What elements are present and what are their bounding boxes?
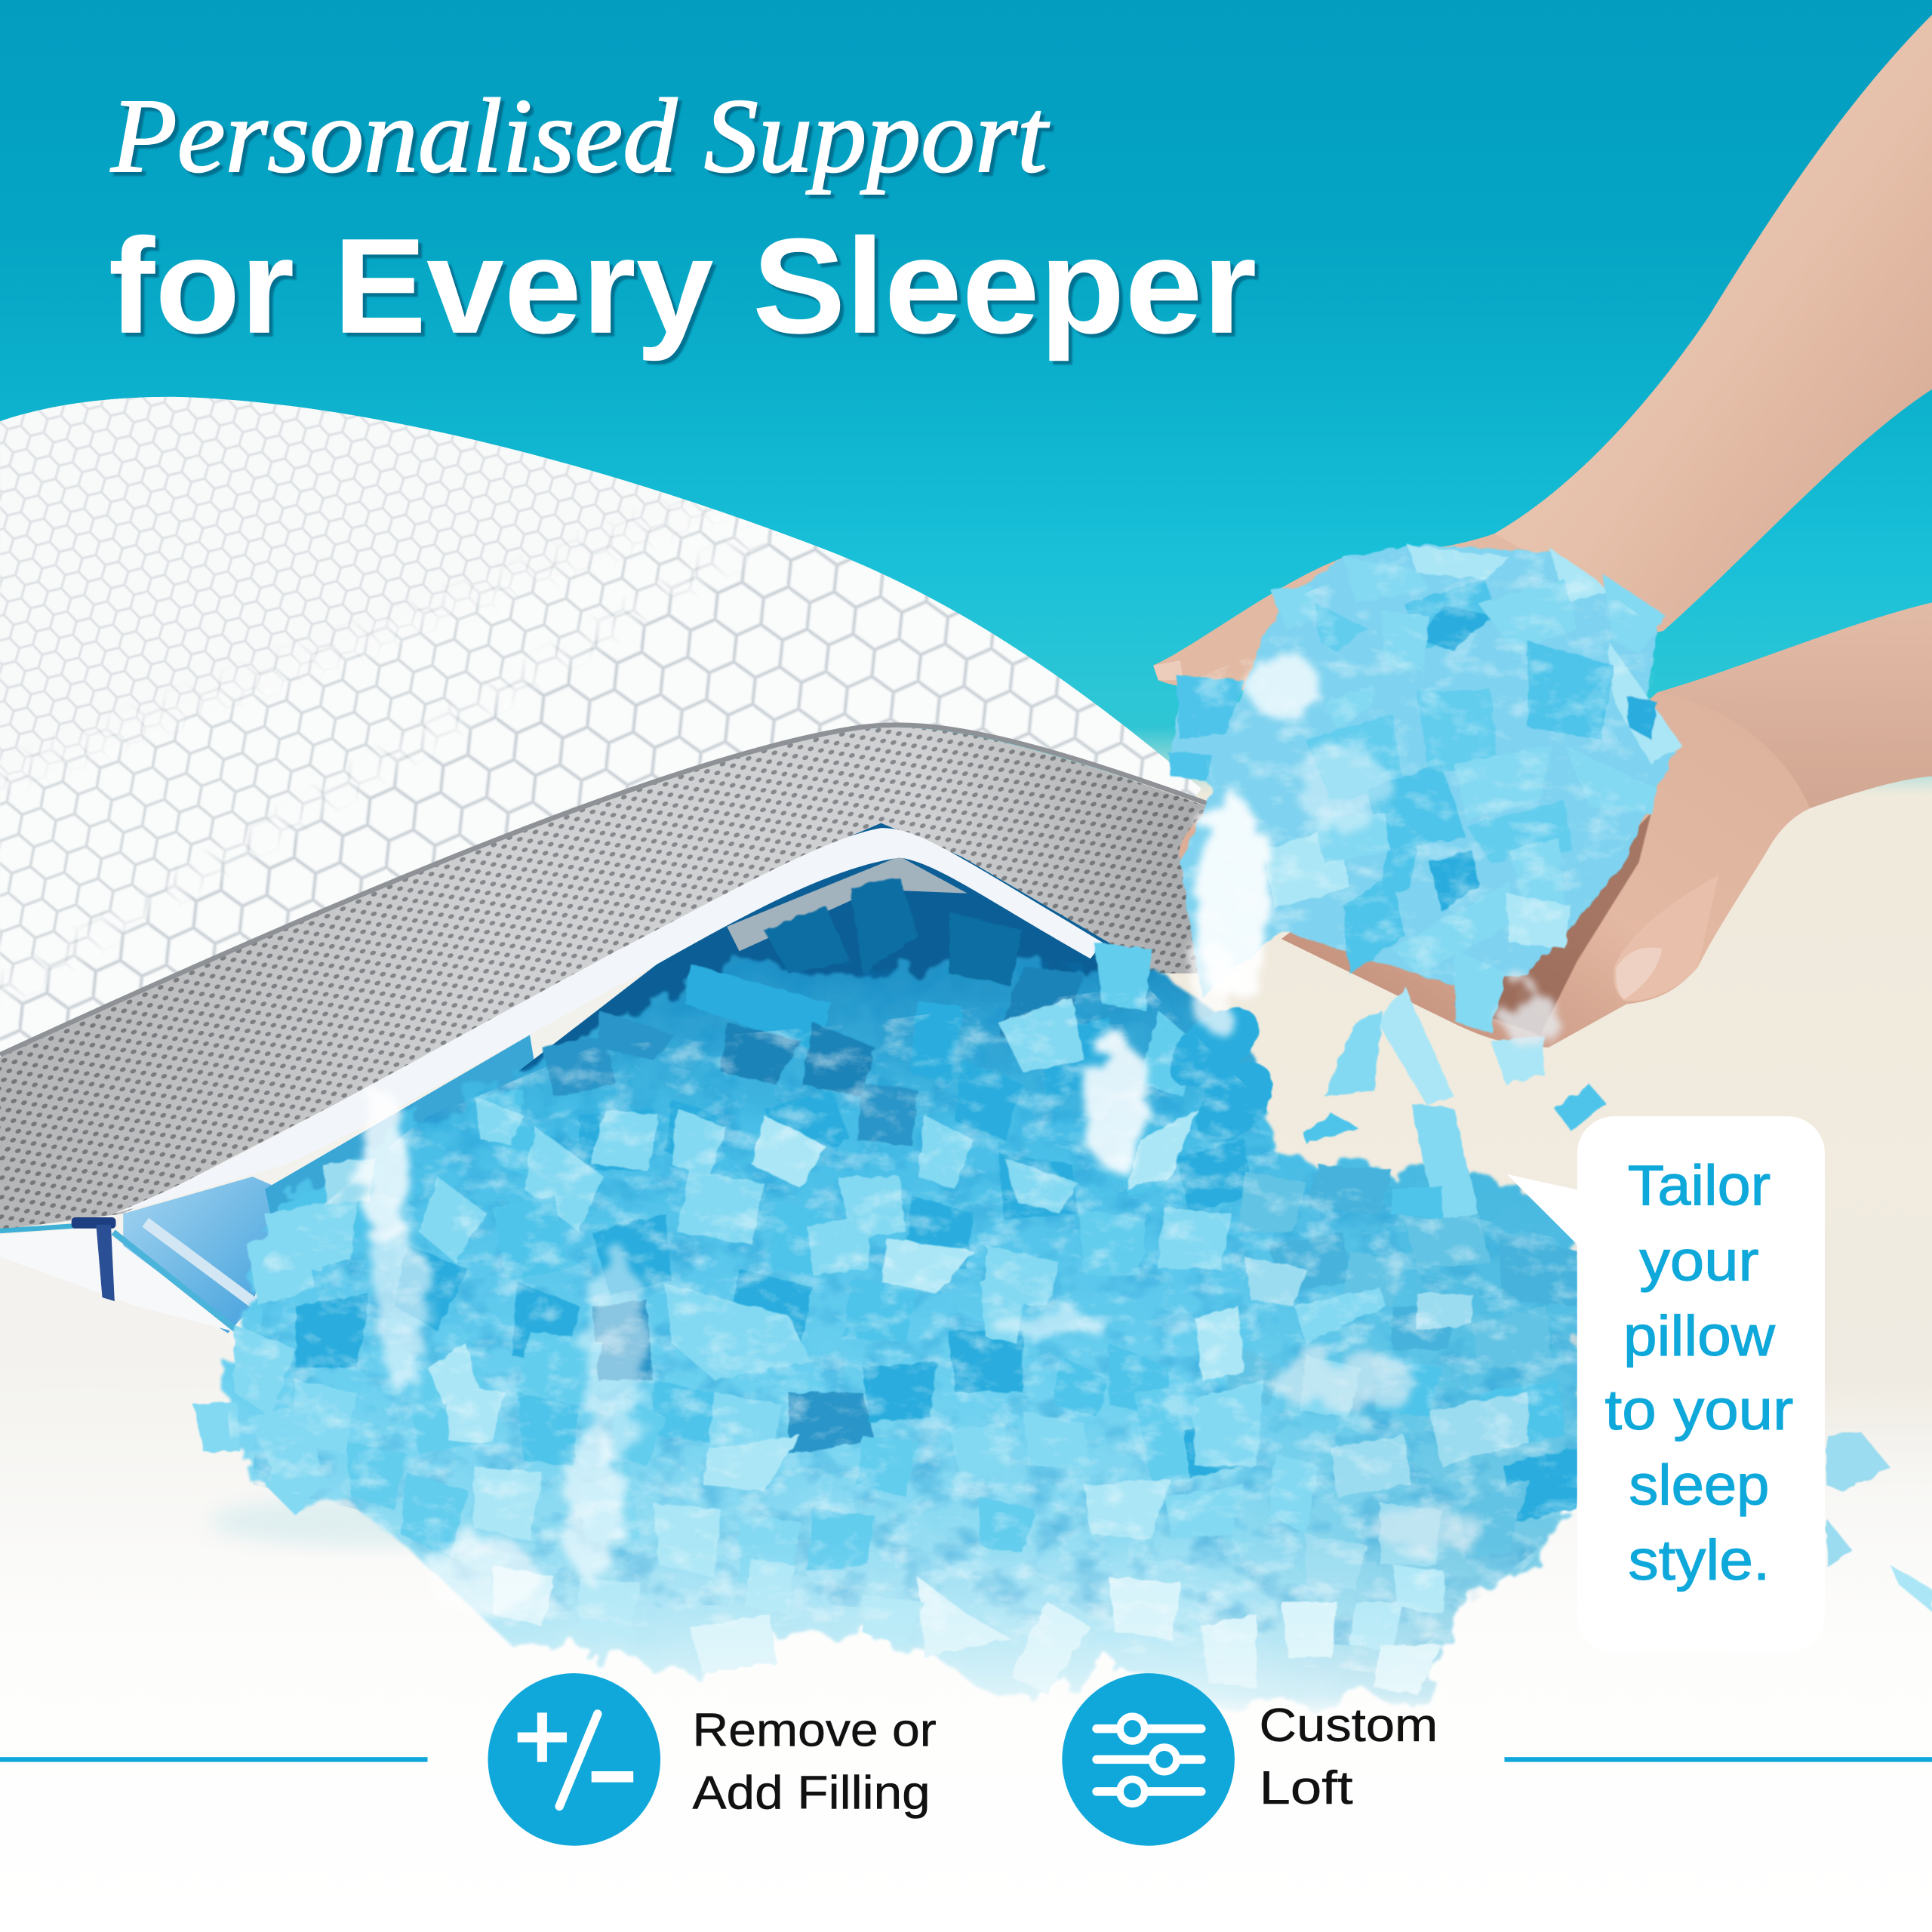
seam piping [0, 725, 1214, 1055]
handful of foam held in the hand [1167, 545, 1810, 1084]
callout: tailor your pillow [1507, 1116, 1825, 1652]
arm: front forearm [1601, 602, 1932, 863]
callout: tailor your pillow: sleep [1629, 1453, 1769, 1516]
mesh shading [0, 728, 1232, 1229]
inner mesh lining [727, 857, 968, 951]
label: custom loft: Custom [1260, 1700, 1438, 1752]
callout: tailor your pillow: style. [1629, 1528, 1770, 1592]
arm: back forearm and upper hand [1153, 15, 1932, 715]
floor shadow under the pile [210, 1497, 530, 1546]
callout: tailor your pillow: your [1639, 1229, 1759, 1292]
zipper band [113, 828, 1103, 1214]
zipper pull [72, 1217, 115, 1301]
cotton fibre wisps over the pile [360, 1035, 1484, 1620]
callout: tailor your pillow: Tailor [1628, 1154, 1770, 1217]
pillow mesh side panel [0, 728, 1232, 1229]
foam mass [1171, 545, 1675, 998]
foam chips, light top layer [193, 1201, 1527, 1694]
label: remove or add filling: Remove or [693, 1704, 937, 1756]
foam chips, deep layer near the pillow opening [475, 877, 1287, 1214]
pile depth mottling [253, 961, 1583, 1651]
cotton mottling in hand [1180, 545, 1657, 998]
palm of front hand [1281, 693, 1810, 1048]
cotton fibres in hand [1186, 649, 1552, 1048]
title line 2: for Every Sleeper [109, 211, 1257, 362]
pillow opening: dark interior [518, 823, 1171, 1134]
cream wall behind hand [863, 727, 1932, 1491]
callout: tailor your pillow: to your [1605, 1378, 1793, 1441]
lower finger of upper hand [1179, 789, 1269, 869]
foam pile [193, 877, 1583, 1706]
callout: tailor your pillow: pillow [1623, 1304, 1776, 1367]
icon: sliders [1062, 1673, 1235, 1846]
foam pile base [228, 961, 1583, 1706]
falling foam chips [1303, 986, 1932, 1612]
pile right side shade [1271, 1162, 1577, 1706]
label: remove or add filling: Add Filling [693, 1767, 931, 1820]
label: remove or add filling [693, 1704, 937, 1820]
cotton mottling over the pile [222, 986, 1583, 1675]
label: custom loft: Loft [1260, 1762, 1353, 1814]
shadow under handful [1454, 814, 1651, 1035]
label: custom loft [1260, 1700, 1438, 1814]
foam chips in hand [1167, 545, 1682, 1084]
thumb [1614, 875, 1719, 1001]
left feature line [0, 1757, 428, 1762]
right feature line [1504, 1757, 1932, 1762]
pillow [0, 370, 1232, 1334]
icon: plus minus [488, 1673, 660, 1846]
thumbnail [1616, 948, 1662, 999]
pillow opening: lower fill under the band [265, 1035, 555, 1244]
pillow top quilted surface [0, 370, 1232, 1072]
title line 1: Personalised Support [110, 78, 1050, 195]
lower quilted lip [0, 1227, 240, 1334]
foam chips, middle layer [234, 1097, 1577, 1521]
inner flap [123, 1177, 281, 1334]
